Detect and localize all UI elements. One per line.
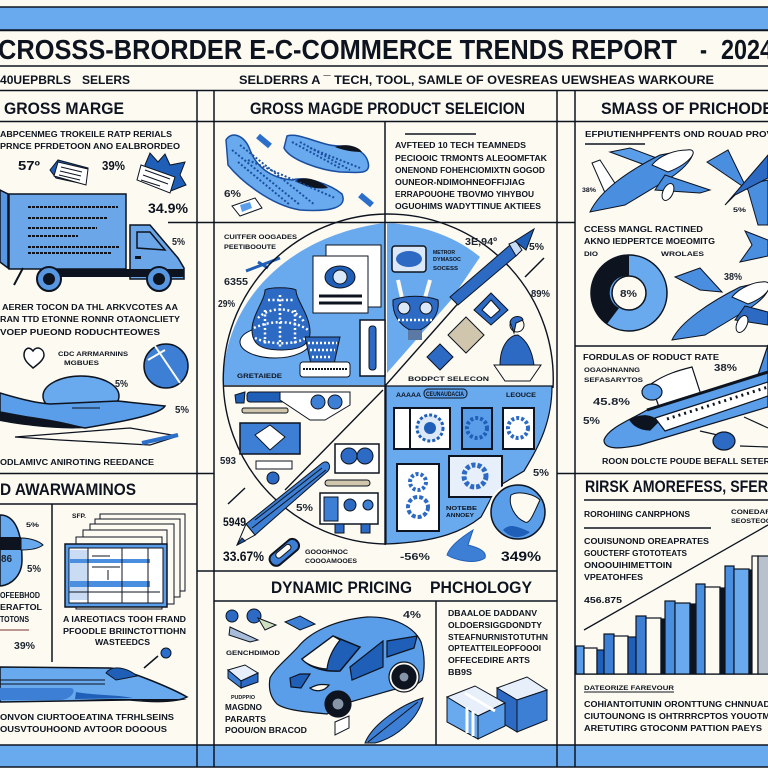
- icon: cap: [0, 515, 43, 586]
- stats: pie top right: 89%: [531, 289, 550, 300]
- text: side note: CONEDAR: [731, 509, 768, 516]
- text block: risk: VPEATOHFES: [584, 573, 644, 582]
- text: side note: [731, 509, 768, 525]
- text block: plane notes: WROLAES: [661, 251, 705, 258]
- icon: delivery truck: [0, 190, 184, 291]
- stats: pie left bottom: 5949: [223, 515, 246, 529]
- label: legend row: LEOUCE: [506, 393, 536, 399]
- stat: rate: [583, 363, 737, 427]
- tall card: [360, 320, 385, 376]
- icon: pin: [144, 648, 171, 668]
- caption: risk footer: ARETUTIRG GTOCONM PATTION PAEYS: [584, 724, 763, 733]
- caption: train: OUSVTOUHOOND AVTOOR DOOOUS: [0, 725, 168, 734]
- label: metror: METROR: [433, 250, 455, 256]
- text block: pricing: STEAFNURNISTOTUTHN: [448, 633, 548, 642]
- text block: risk: COUISUNOND OREAPRATES: [584, 537, 710, 546]
- caption: risk footer: COHIANTOITUNIN ORONTTUNG CHNNUAD: [584, 700, 768, 709]
- text block: pricing: OPTEATTEILEOPFOOOI: [448, 644, 541, 653]
- stats: cap: 39%: [14, 641, 35, 652]
- caption: clip: [305, 549, 358, 565]
- caption: left of pie: CUITFER OOGADES: [224, 234, 298, 241]
- stat: rate: 45.8%: [593, 397, 630, 408]
- stats: cap: [14, 522, 41, 652]
- label: greatiede: GRETAIEDE: [237, 373, 283, 380]
- caption: stack: [63, 615, 186, 647]
- icon: globe: [488, 482, 548, 542]
- panel: gross margin: [0, 130, 189, 467]
- caption: risk footer: CIUTOUNONG IS OHTRRRCPTOS YOUOTM: [584, 712, 768, 721]
- text block: pricing: OLDOERSIGGDONDTY: [448, 621, 543, 630]
- caption: rate: SEFASARYTOS: [584, 377, 644, 384]
- stats: pie left bottom: 33.67%: [223, 548, 264, 564]
- stat labels: [18, 158, 189, 248]
- caption: heart: MGBUES: [64, 360, 100, 367]
- caption: train: [0, 713, 175, 734]
- caption: left of pie: PEETIBOOUTE: [224, 244, 277, 251]
- illustration: flying saucer: [0, 376, 178, 445]
- label: notebe: ANNOEY: [446, 513, 475, 519]
- pie wedge: bottom right: [386, 386, 552, 544]
- pie wedge: top right: [385, 223, 480, 373]
- text block: pricing: [448, 609, 548, 677]
- icon: note: [50, 160, 88, 185]
- stat: plane one: 38%: [582, 187, 596, 194]
- caption: stack: PFOODLE BRIINCTOTTIOHN: [63, 627, 186, 636]
- text block: tech trends: OGUOHIMS WADYTTINUE AKTIEES: [395, 202, 542, 211]
- icon: cap: 86: [1, 554, 13, 565]
- caption: cap: ERAFTOL: [0, 603, 42, 612]
- text block: margin intro: PRNCE PFRDETOON ANO EALBRORDEO: [0, 142, 180, 151]
- label: metror: SOCESS: [433, 266, 459, 272]
- illustration: shipping boxes: [447, 677, 547, 739]
- tile cards: [394, 408, 534, 531]
- icon: round gauge: [144, 344, 188, 388]
- trend line: [584, 525, 768, 630]
- caption: stack: WASTEEDCS: [95, 638, 151, 647]
- stats: pie top right: 3E,94º: [465, 237, 497, 248]
- icon: tag: [335, 716, 349, 735]
- text block: plane notes: DIO: [584, 251, 598, 258]
- blue stamp: [392, 246, 426, 272]
- icon: compass: [246, 258, 280, 271]
- stats: pie bottom: -56%: [400, 552, 430, 563]
- title: -: [700, 34, 707, 65]
- caption: planes: EFPIUTIENHPFENTS OND ROUAD PROV: [585, 130, 768, 139]
- caption: clip: COOOAMOOES: [305, 558, 358, 565]
- text block: margin body: [0, 303, 181, 337]
- top banner: [0, 7, 768, 30]
- label: genchdimod: GENCHDIMOD: [226, 650, 280, 657]
- stats: cap: 5%: [27, 564, 41, 575]
- text block: risk: GOUCTERF GTOTOTEATS: [584, 549, 688, 558]
- stats: pie top right: 5%: [529, 242, 544, 253]
- caption: left of pie: [218, 234, 298, 310]
- text block: margin body: RAN TTD ETONNE RONNR OTAONCLIETY: [0, 315, 181, 324]
- caption: rate: OGAOHNANNG: [584, 367, 640, 374]
- stat: shoes: 6%: [224, 189, 241, 200]
- text block: pricing: DBAALOE DADDANV: [448, 609, 538, 618]
- stat: plane two: 5%: [733, 207, 746, 214]
- panel: dynamic pricing: [225, 578, 548, 743]
- text block: tech trends: [395, 134, 547, 211]
- icon: top pen: [450, 229, 534, 305]
- text block: tech trends: ONENOND FOHEHCIOMIXTN GOGOD: [395, 166, 545, 175]
- label: legend row: AAAAA: [396, 393, 422, 399]
- label: metror: [433, 250, 461, 272]
- illustration: document stack: [65, 514, 185, 609]
- icon: woman: [494, 316, 541, 381]
- caption: risk footer: [584, 685, 768, 733]
- text block: margin body: VOEP PUEOND RODUCHTEOWES: [0, 328, 161, 337]
- icon: feather leaf: [365, 698, 423, 743]
- porcelain mask: [393, 280, 438, 340]
- illustration: plane three: [672, 268, 768, 340]
- bar chart: [576, 556, 768, 674]
- panel: product selection: [218, 134, 553, 568]
- text block: risk: 456.875: [584, 596, 623, 605]
- caption: stack: A IAREOTIACS TOOH FRAND: [63, 615, 186, 624]
- panel: brand awareness: [0, 480, 187, 734]
- text: campaigns: ROROHIING CANRPHONS: [584, 510, 691, 519]
- subtitle bar: [0, 73, 714, 87]
- stat labels: 5%: [172, 237, 185, 248]
- stats: pie left bottom: [220, 456, 313, 564]
- stat: rate: 38%: [714, 363, 737, 374]
- pie chart: product selection: [220, 214, 553, 568]
- illustration: plane four: [740, 231, 768, 262]
- stats: pie bottom: [400, 548, 542, 564]
- caption: cap: [0, 591, 42, 624]
- stat: 4%: 4%: [403, 610, 421, 621]
- stats: pie bottom: 349%: [501, 548, 542, 564]
- stats: pie top right: [465, 237, 550, 300]
- stat: plane three: 38%: [724, 272, 742, 283]
- heading: dynamic pricing: [271, 578, 533, 597]
- porcelain vase: [240, 288, 310, 358]
- pie wedge: top left: [223, 223, 385, 385]
- heading: awareness: D AWARWAMINOS: [0, 480, 136, 499]
- text block: margin intro: ABPCENMEG TROKEILE RATP RERIALS: [0, 130, 173, 139]
- text block: margin intro: [0, 130, 180, 151]
- illustration: patterned shoes: [226, 135, 372, 210]
- icon: large pen: [237, 462, 330, 545]
- label: product selection: BODPCT SELECON: [408, 376, 489, 383]
- icon: burst note: [137, 153, 186, 193]
- panel: product rate: [583, 345, 768, 466]
- diamond tiles: [427, 293, 508, 370]
- illustration: plane two: [707, 150, 768, 225]
- subtitle bar: SELDERRS A ¯ TECH, TOOL, SAMLE OF OVESREAS UEWSHEAS WARKOURE: [239, 73, 714, 87]
- text block: plane notes: [584, 225, 715, 258]
- icon: leaf: [447, 530, 485, 561]
- label: legend row: [396, 389, 536, 399]
- bottom banner: [0, 745, 768, 767]
- caption: parts: PUDPPIO: [231, 695, 255, 701]
- panel: planes: [582, 130, 768, 340]
- caption: risk footer: DATEORIZE FAREVOUR: [584, 685, 674, 692]
- label: notebe: NOTEBE: [446, 506, 478, 512]
- caption: heart: CDC ARRMARNINS: [58, 351, 129, 358]
- heading: gross marge: GROSS MARGE: [4, 99, 124, 118]
- pie bottom left content: [235, 392, 379, 533]
- stat labels: 57º: [18, 158, 40, 173]
- text block: margin body: AERER TOCON DA THL ARKVCOTES AA: [2, 303, 178, 312]
- caption: parts: PARARTS: [225, 715, 267, 724]
- icon: small box: [228, 665, 258, 688]
- caption: left of pie: 29%: [218, 299, 235, 310]
- caption: train: ONVON CIURTOOEATINA TFRHLSEINS: [0, 713, 175, 722]
- illustration: plane one: [590, 148, 710, 212]
- text block: risk: ONOOUIHIMETTOIN: [584, 561, 672, 570]
- heading: dynamic pricing: DYNAMIC PRICING: [271, 578, 412, 597]
- illustration: blue car: [269, 617, 424, 717]
- donut chart: 8%: [620, 289, 637, 300]
- icon: small card: [232, 198, 262, 216]
- heading: dynamic pricing: PHCHOLOGY: [430, 578, 533, 597]
- donut chart: [591, 255, 667, 331]
- caption: parts: MAGDNO: [225, 703, 262, 712]
- stat labels: 39%: [102, 158, 125, 173]
- text block: plane notes: CCESS MANGL RACTINED: [584, 225, 703, 234]
- text block: tech trends: PECIOOIC TRMONTS ALEOOMFTAK: [395, 154, 547, 163]
- stat: stack: SFP.: [72, 513, 86, 520]
- arrow: pie left bottom: [228, 488, 245, 504]
- stats: cap: 5%: [26, 522, 39, 529]
- arrow: pie right: [525, 258, 544, 277]
- stats: pie left bottom: 593: [220, 456, 236, 467]
- caption: jet: ROON DOLCTE POUDE BEFALL SETER: [602, 457, 768, 466]
- label: legend row: CEUNAUDACIA: [426, 392, 465, 398]
- caption: parts: [225, 695, 307, 735]
- stat: saucer: 5%: [175, 405, 189, 416]
- caption: clip: GOOOHNOC: [305, 549, 348, 556]
- stat labels: 34.9%: [148, 200, 189, 216]
- text block: risk: [584, 537, 710, 605]
- caption: heart: [58, 351, 129, 367]
- caption: left of pie: 6355: [224, 277, 248, 288]
- subtitle bar: 40UEPBRLS: [0, 73, 71, 87]
- caption: saucer: ODLAMIVC ANIROTING REEDANCE: [0, 458, 155, 467]
- heading: product selection: GROSS MAGDE PRODUCT SELEICION: [250, 99, 525, 118]
- white card group: [313, 245, 381, 313]
- text block: plane notes: AKNO IEDPERTCE MOEOMITG: [584, 237, 715, 246]
- text block: tech trends: OUNEOR-NDIMOHNEOFFIJIAG: [395, 178, 525, 187]
- illustration: jet airliner: [604, 345, 768, 450]
- label: metror: DYMASOC: [433, 257, 461, 263]
- stat: saucer: 5%: [115, 379, 128, 390]
- illustration: bullet train: [0, 667, 187, 702]
- stat: 5%: 5%: [533, 468, 549, 479]
- subtitle bar: SELERS: [82, 73, 130, 87]
- caption: parts: POOU/ON BRACOD: [225, 726, 307, 735]
- icon: heart: [24, 348, 44, 368]
- text block: tech trends: AVFTEED 10 TECH TEAMNEDS: [395, 141, 527, 150]
- text block: pricing: OFFECEDIRE ARTS: [448, 656, 531, 665]
- stat: rate: 5%: [583, 416, 600, 427]
- stat: saucer: [115, 379, 189, 416]
- caption: cap: OFEEBHOD: [0, 591, 40, 600]
- text block: tech trends: ERRAPOUOHE TBOVMO YIHYBOU: [395, 190, 534, 199]
- text: side note: SEOSTEOC: [731, 518, 768, 525]
- text block: pricing: BB9S: [448, 668, 473, 677]
- icon: paper clip: [267, 536, 302, 568]
- label: notebe: [446, 506, 478, 519]
- porcelain cup: [300, 337, 350, 377]
- panel: risk awareness: [576, 477, 768, 733]
- small product icons: [226, 609, 315, 642]
- stats: pie left bottom: 5%: [296, 503, 313, 514]
- title: CROSSS-BRORDER E-C-COMMERCE TRENDS REPORT: [0, 34, 677, 65]
- caption: rate: [584, 367, 644, 384]
- caption: cap: TOTONS: [0, 615, 30, 624]
- heading: product rate: FORDULAS OF RODUCT RATE: [583, 353, 720, 362]
- pie outline: [223, 214, 553, 545]
